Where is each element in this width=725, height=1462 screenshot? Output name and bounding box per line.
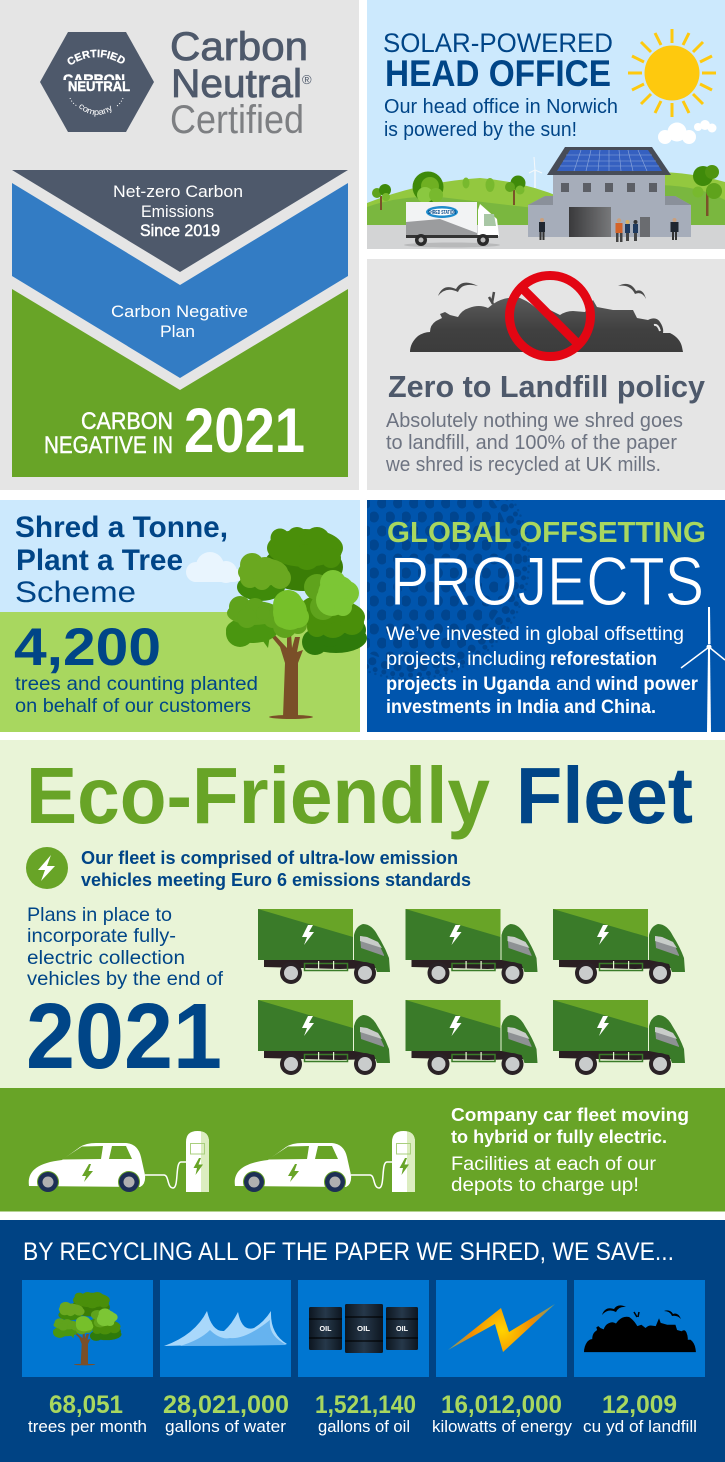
stat: 4,200 trees: on behalf of our customers	[15, 695, 251, 717]
globe background	[367, 500, 530, 680]
heading: shred a tonne, plant a tree scheme: Shred a Tonne,	[15, 511, 228, 544]
stats: savings numbers: 28,021,000	[163, 1391, 289, 1419]
heading: solar-powered head office: HEAD OFFICE	[385, 53, 611, 94]
text: 2021: 2021	[26, 984, 222, 1088]
text: company car fleet: Facilities at each of our	[451, 1154, 657, 1175]
panel: zero to landfill policy	[367, 259, 725, 490]
chevron: carbon negative in 2021: NEGATIVE IN	[44, 432, 173, 459]
stats: savings numbers: 68,051	[49, 1391, 123, 1419]
icon: birds	[438, 283, 646, 299]
chevron: carbon negative plan: Plan	[160, 322, 195, 341]
logo: carbon neutral company hexagon badge: CERTIFIED	[68, 50, 125, 65]
text: ultra-low emission fleet: vehicles meeting Euro 6 emissions standards	[81, 870, 471, 890]
stat: 4,200 trees: 4,200	[14, 618, 161, 677]
text: landfill description: we shred is recycled at UK mills.	[385, 454, 661, 476]
logo: carbon neutral company hexagon badge: company	[79, 104, 112, 117]
card: water	[160, 1280, 291, 1377]
text: electric vehicle plans	[27, 904, 224, 990]
text: offsetting description: projects, including	[386, 649, 546, 670]
text: landfill description: Absolutely nothing we shred goes	[386, 410, 683, 432]
labels: savings units	[28, 1418, 697, 1436]
panel: recycling savings	[0, 1220, 725, 1462]
text: ultra-low emission fleet	[81, 848, 471, 890]
heading: carbon neutral certified: Carbon	[170, 25, 308, 69]
heading: solar-powered head office	[383, 28, 613, 94]
text: offsetting description: and	[556, 674, 591, 695]
card: trees	[22, 1280, 153, 1377]
icon: prohibition sign	[510, 276, 590, 356]
text: company car fleet	[451, 1105, 689, 1196]
panel: solar-powered head office	[367, 0, 725, 249]
logo: carbon neutral company hexagon badge: CARBON	[63, 71, 125, 87]
chevron: carbon negative in 2021	[12, 289, 348, 477]
text: electric vehicle plans: electric collection	[27, 947, 185, 969]
heading: shred a tonne, plant a tree scheme: Plant a Tree	[16, 544, 183, 577]
chevron: net-zero	[12, 170, 348, 272]
icon: clouds	[658, 120, 716, 144]
chevron: carbon negative in 2021: CARBON	[81, 408, 173, 435]
icon: electric car and charger	[235, 1131, 415, 1193]
text: offsetting description: reforestation	[550, 649, 657, 670]
stats: savings numbers	[49, 1391, 677, 1419]
icon: sun	[628, 29, 716, 117]
text: head office description: Our head office in Norwich	[384, 96, 618, 118]
text: offsetting description: We’ve invested in global offsetting	[386, 624, 684, 645]
illustration: shred station truck: SHRED STATION	[428, 210, 456, 216]
chevron: net-zero: Net-zero Carbon	[113, 182, 243, 201]
text: electric vehicle plans: vehicles by the end of	[27, 968, 224, 990]
panel: global offsetting projects	[367, 500, 725, 732]
card: oil barrels: OIL	[357, 1324, 370, 1333]
heading: by recycling: BY RECYCLING ALL OF THE PAPER WE SHRED, WE SAVE...	[23, 1238, 674, 1266]
heading: eco-friendly fleet: Eco-Friendly	[26, 751, 490, 840]
heading: eco-friendly fleet: Fleet	[516, 751, 693, 840]
heading: zero to landfill policy: Zero to Landfill policy	[388, 369, 706, 404]
text: company car fleet: to hybrid or fully electric.	[451, 1127, 667, 1147]
text: landfill description	[385, 410, 683, 476]
text: company car fleet: depots to charge up!	[451, 1175, 639, 1196]
logo: carbon neutral company hexagon badge	[40, 32, 154, 132]
text: offsetting description: investments in India and China.	[386, 697, 656, 718]
stat: 4,200 trees: trees and counting planted	[15, 673, 258, 695]
icon: wind turbine	[681, 607, 725, 732]
text: offsetting description: projects in Uganda	[386, 674, 550, 695]
card: oil barrels: OIL	[320, 1324, 332, 1333]
chevron: net-zero: Emissions	[141, 202, 214, 221]
text: electric vehicle plans: incorporate fully-	[27, 925, 176, 947]
labels: savings units: gallons of water	[165, 1418, 287, 1436]
labels: savings units: gallons of oil	[318, 1418, 410, 1436]
card: oil barrels: OIL	[396, 1324, 408, 1333]
icon: cloud	[186, 552, 244, 583]
text: company car fleet: Company car fleet moving	[451, 1105, 689, 1125]
heading: carbon neutral certified: Certified	[170, 98, 304, 142]
panel: carbon neutral certification	[0, 0, 359, 490]
card: oil barrels	[298, 1280, 429, 1377]
icons: electric trucks	[258, 909, 685, 1075]
card: landfill	[574, 1280, 705, 1377]
text: offsetting description	[386, 624, 699, 718]
card: energy	[436, 1280, 567, 1377]
panel: company car fleet	[0, 1088, 725, 1212]
chevron: carbon negative in 2021: 2021	[184, 396, 305, 466]
icons: trees	[372, 165, 722, 216]
stat: 4,200 trees	[14, 618, 258, 717]
labels: savings units: trees per month	[28, 1418, 147, 1436]
stats: savings numbers: 12,009	[602, 1391, 677, 1419]
landscape: hills and road	[367, 172, 725, 249]
heading: shred a tonne, plant a tree scheme	[15, 511, 228, 609]
logo: carbon neutral company hexagon badge: NEUTRAL	[68, 79, 130, 94]
illustration: people	[539, 218, 678, 242]
icon: wind turbine	[529, 157, 542, 188]
panel: eco-friendly fleet	[0, 740, 725, 1089]
labels: savings units: cu yd of landfill	[583, 1418, 697, 1436]
icon: lightning bolt badge	[26, 847, 68, 889]
icon: landfill heap	[410, 292, 683, 352]
text: electric vehicle plans: Plans in place to	[27, 904, 172, 926]
illustration: head office building with solar roof	[528, 147, 691, 237]
heading: carbon neutral certified: Neutral	[171, 62, 302, 106]
illustration: shred station truck	[404, 202, 500, 248]
icon: electric car and charger	[29, 1131, 209, 1193]
heading: carbon neutral certified: ®	[302, 72, 312, 87]
text: head office description	[384, 96, 618, 141]
stats: savings numbers: 1,521,140	[315, 1391, 416, 1419]
heading: shred a tonne, plant a tree scheme: Scheme	[15, 576, 136, 609]
chevron: carbon negative plan	[12, 183, 348, 378]
panel: shred a tonne plant a tree	[0, 500, 367, 732]
heading: carbon neutral certified	[170, 25, 312, 142]
chevron: net-zero: Since 2019	[140, 221, 220, 240]
text: head office description: is powered by the sun!	[384, 119, 577, 141]
icon: tree	[226, 527, 367, 719]
chevron: carbon negative plan: Carbon Negative	[111, 302, 248, 321]
text: offsetting description: wind power	[595, 674, 699, 695]
text: ultra-low emission fleet: Our fleet is comprised of ultra-low emission	[81, 848, 458, 868]
heading: solar-powered head office: SOLAR-POWERED	[383, 28, 613, 58]
labels: savings units: kilowatts of energy	[432, 1418, 573, 1436]
text: landfill description: to landfill, and 100% of the paper	[386, 432, 677, 454]
heading: global offsetting projects: GLOBAL OFFSETTING	[387, 517, 706, 549]
stats: savings numbers: 16,012,000	[441, 1391, 562, 1419]
